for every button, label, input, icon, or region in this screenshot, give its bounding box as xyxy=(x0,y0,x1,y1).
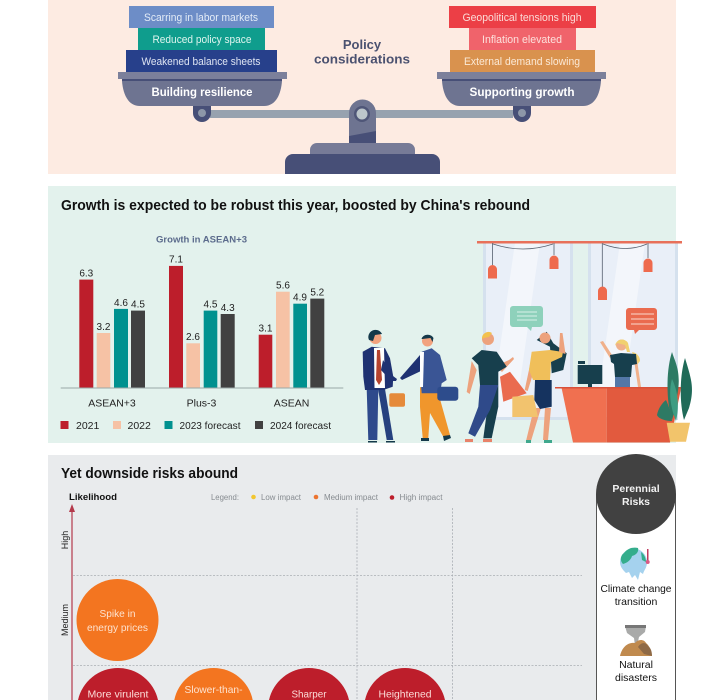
stack: building resilience factors: Weakened balance sheets xyxy=(142,56,261,68)
chart legend: 2021 xyxy=(76,420,100,432)
bubble: spike in energy prices: energy prices xyxy=(87,622,148,634)
person: businessman xyxy=(363,330,405,442)
heading: growth title: Growth is expected to be robust this year, boosted by China's rebound xyxy=(61,197,530,214)
bar chart: growth in ASEAN+3: 6.3 xyxy=(79,268,94,280)
panel: policy considerations xyxy=(48,0,676,174)
legend: impact: Low impact xyxy=(261,493,302,502)
perennial risks circle xyxy=(596,454,676,534)
person: man with shopping bag xyxy=(465,332,527,442)
icon: balance scale xyxy=(118,72,606,174)
perennial risks circle: Perennial xyxy=(612,483,660,495)
bar chart: growth in ASEAN+3: ASEAN+3 xyxy=(88,398,136,410)
legend: impact xyxy=(211,493,443,502)
bubble: sharper xyxy=(269,668,349,700)
chart title: Growth in ASEAN+3 xyxy=(156,234,247,244)
stack: supporting growth factors: Geopolitical tensions high xyxy=(462,12,582,24)
bar chart: growth in ASEAN+3: 4.3 xyxy=(221,303,235,314)
bar chart: growth in ASEAN+3: 4.5 xyxy=(131,300,145,310)
chart legend: 2023 forecast xyxy=(180,420,241,432)
bubble: more virulent xyxy=(78,668,158,700)
bar chart: growth in ASEAN+3: 4.5 xyxy=(204,300,218,310)
illustration: shop and customers xyxy=(363,241,692,443)
bar chart: growth in ASEAN+3: 3.1 xyxy=(259,324,273,334)
bar chart: growth in ASEAN+3: 3.2 xyxy=(97,322,111,333)
stack: supporting growth factors: External demand slowing xyxy=(464,56,580,68)
icon: melting globe with thermometer xyxy=(620,548,650,580)
icon: potted plant xyxy=(657,352,692,442)
panel: growth xyxy=(48,186,692,443)
bubble: slower-than-expected xyxy=(174,668,253,700)
text: climate change transition: Climate change xyxy=(600,583,672,595)
legend: impact: Medium impact xyxy=(324,493,379,502)
bubble: spike in energy prices xyxy=(76,579,158,661)
bubble: slower-than-expected: Slower-than- xyxy=(184,684,243,696)
y axis: likelihood: High xyxy=(60,531,70,549)
stack: building resilience factors: Scarring in labor markets xyxy=(144,12,258,24)
bar chart: growth in ASEAN+3: Plus-3 xyxy=(187,398,217,410)
heading: policy considerations: considerations xyxy=(314,52,410,66)
heading: yet downside risks abound: Yet downside risks abound xyxy=(61,465,238,482)
bar chart: growth in ASEAN+3: 4.6 xyxy=(114,298,128,309)
chart legend: 2024 forecast xyxy=(270,420,331,432)
label: supporting growth: Supporting growth xyxy=(470,85,574,99)
bar chart: growth in ASEAN+3: 4.9 xyxy=(293,292,307,304)
bubble: spike in energy prices: Spike in xyxy=(100,608,136,620)
right column background xyxy=(596,494,676,700)
person: man with briefcase xyxy=(400,335,458,441)
y axis: likelihood: Medium xyxy=(60,604,70,636)
bar chart: growth in ASEAN+3: 7.1 xyxy=(169,254,183,266)
heading: policy considerations: Policy xyxy=(343,37,382,52)
label: building resilience: Building resilience xyxy=(152,85,253,99)
text: natural disasters: disasters xyxy=(615,672,657,684)
bubble: heightened xyxy=(365,668,445,700)
grid xyxy=(73,508,582,700)
chart legend xyxy=(60,420,331,432)
bar chart: growth in ASEAN+3: 5.6 xyxy=(276,280,290,292)
legend: impact: Legend: xyxy=(211,493,239,502)
stack: supporting growth factors xyxy=(449,6,596,72)
y axis: likelihood: Likelihood xyxy=(69,492,117,503)
icon: reception desk xyxy=(555,340,681,442)
bar chart: growth in ASEAN+3: ASEAN xyxy=(274,398,309,410)
panel: downside risks xyxy=(48,454,676,700)
person: woman waving xyxy=(512,332,567,443)
stack: supporting growth factors: Inflation elevated xyxy=(482,34,562,46)
chart legend: 2022 xyxy=(128,420,151,432)
text: climate change transition: transition xyxy=(615,596,657,608)
bar chart: growth in ASEAN+3: 2.6 xyxy=(186,332,200,343)
y axis: likelihood xyxy=(60,492,117,700)
stack: building resilience factors: Reduced policy space xyxy=(152,34,252,46)
perennial risks circle: Risks xyxy=(622,496,650,508)
bar chart: growth in ASEAN+3 xyxy=(61,254,343,410)
text: natural disasters: Natural xyxy=(619,659,653,671)
stack: building resilience factors xyxy=(126,6,277,72)
icon: tornado over hills xyxy=(620,625,652,656)
legend: impact: High impact xyxy=(400,493,443,502)
bar chart: growth in ASEAN+3: 5.2 xyxy=(310,288,325,298)
